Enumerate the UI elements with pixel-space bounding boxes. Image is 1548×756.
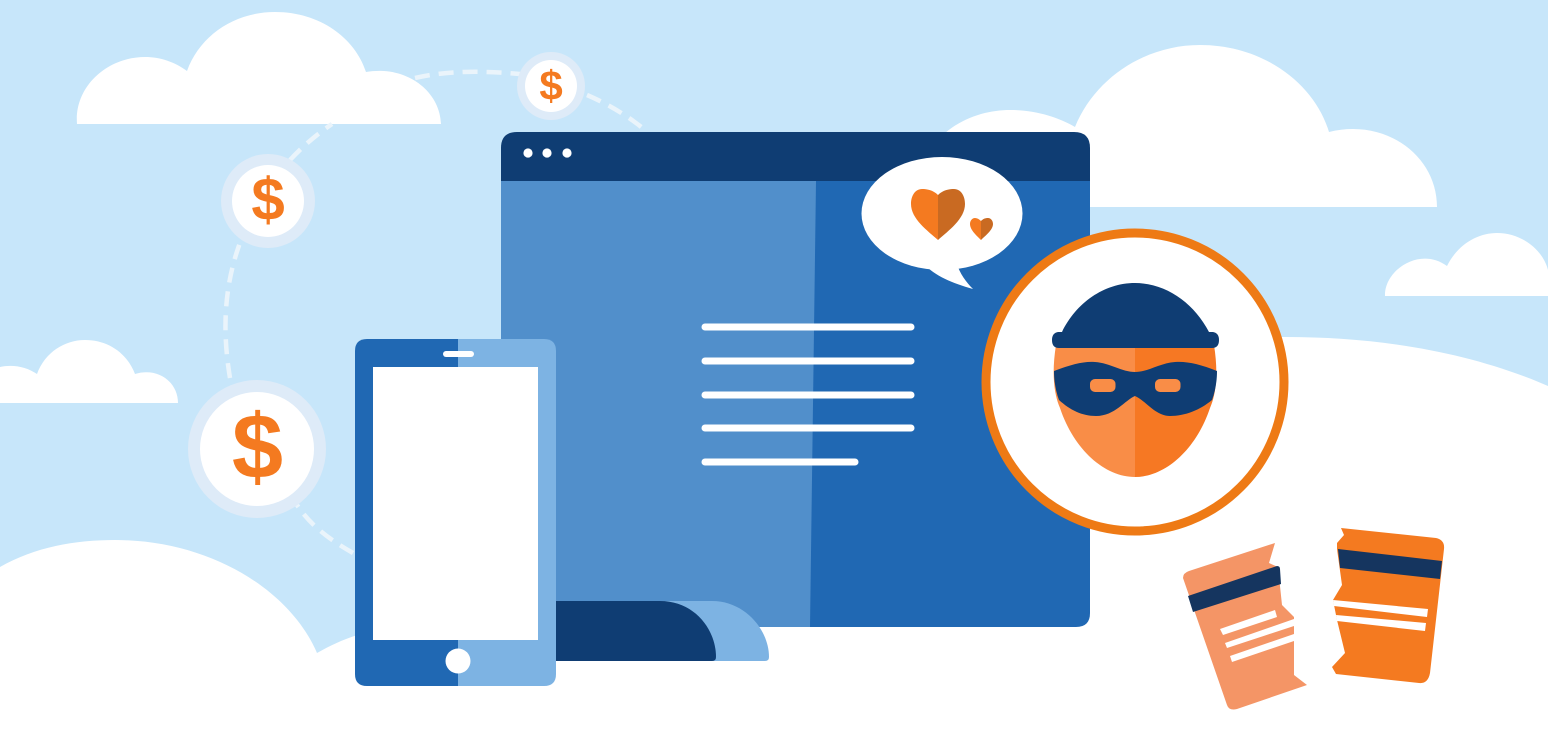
- tablet: [355, 339, 556, 686]
- dashed money trail: [225, 72, 645, 553]
- browser title bar: [501, 132, 1090, 181]
- thief mask: [1054, 362, 1217, 416]
- torn card: right piece: [1332, 528, 1444, 683]
- browser body right: [501, 170, 1090, 627]
- thief badge: [986, 233, 1284, 531]
- small heart: [970, 218, 981, 240]
- thief hat: [1052, 283, 1219, 348]
- coin: small dollar: $: [539, 62, 563, 109]
- coin: medium dollar: $: [251, 166, 285, 233]
- thief face: [1054, 345, 1135, 477]
- thief eyes: [1090, 379, 1116, 392]
- speech bubble with hearts: [862, 157, 1022, 289]
- coin: medium dollar: [221, 154, 315, 248]
- browser window: [501, 132, 1090, 627]
- cloud: small left: [0, 340, 178, 403]
- cloud: top left: [77, 12, 441, 124]
- large heart: [911, 189, 938, 240]
- cloud: small right: [1385, 233, 1548, 296]
- text lines: [705, 327, 911, 462]
- device stand: [550, 601, 769, 661]
- coin: large dollar: [188, 380, 326, 518]
- browser body left panel: [501, 181, 816, 627]
- coin: large dollar: $: [232, 396, 283, 498]
- browser dots: [523, 148, 572, 158]
- ground clouds: [0, 337, 1548, 756]
- coin: small dollar: [517, 52, 585, 120]
- cloud: top right: [945, 45, 1437, 207]
- torn card: left piece: [1183, 543, 1307, 710]
